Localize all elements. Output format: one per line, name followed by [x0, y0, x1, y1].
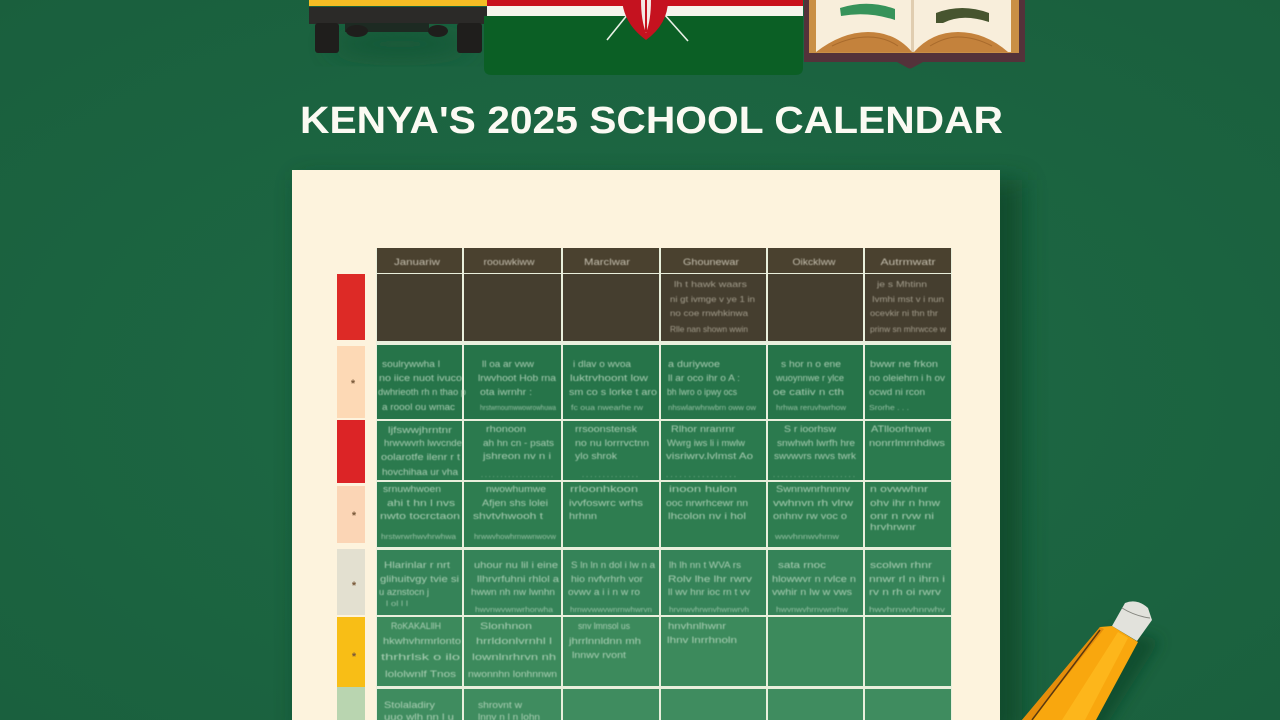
row 3 text: swvwvrs rwvs twrk	[774, 451, 857, 461]
row 6 text: snv lmnsol us	[578, 621, 630, 631]
row 4 text: hrstwrwrhwvhrwhwa	[381, 534, 456, 541]
row 2 text: luktrvhoont low	[570, 373, 649, 383]
row 6 text: RoKAKALllH	[391, 621, 441, 631]
row 3 text: rrsoonstensk	[575, 424, 638, 434]
row 3 text: Wwrg iws li i mwlw	[667, 438, 746, 448]
row 6 text: nwonnhn lonhnnwn	[468, 669, 557, 679]
row 6 text: lnnwv rvont	[572, 650, 627, 660]
row 3 text: hrwvwvrh lwvcnde	[384, 438, 462, 448]
row 6 text: lololwnlf Tnos	[385, 669, 457, 679]
paper shadow	[300, 180, 1022, 720]
row 5 text: hwvnwvwnwrhorwha	[475, 607, 553, 614]
row 5 text: llhrvrfuhni rhlol a	[477, 574, 559, 584]
side tabs	[337, 274, 365, 720]
row 3 text: visriwrv.lvlmst Ao	[666, 451, 753, 461]
row 4 text: hrvhrwnr	[870, 522, 916, 532]
row 4 text: onr n rvw ni	[870, 511, 934, 521]
row 3 text: rhonoon	[486, 424, 526, 434]
row 2 text: soulrywwha l	[382, 359, 440, 369]
row 5 text: hrnwvwwvwnrnwhwrvn	[570, 607, 652, 614]
row 2 text: fc oua nwearhe rw	[571, 405, 644, 412]
row 5 text: glihuitvgy tvie si	[380, 574, 459, 584]
row 2 text: ll oa ar vww	[482, 359, 535, 369]
row 2 text: bh lwro o ipwy ocs	[667, 387, 737, 397]
row 3 text: . . . . . . . . . . . . . . . . . . . .	[773, 472, 855, 479]
row 2 text: ll ar oco ihr o A :	[668, 373, 740, 383]
row 3 text: snwhwh lwrfh hre	[777, 438, 855, 448]
title: KENYA'S 2025 SCHOOL CALENDAR	[300, 100, 1003, 142]
calendar table	[376, 248, 952, 720]
table text	[378, 257, 947, 720]
row 2 text: no iice nuot ivuco	[379, 373, 462, 383]
row 2 text: lrwvhoot Hob rna	[478, 373, 556, 383]
row 3 text: oolarotfe ilenr r t	[381, 452, 461, 462]
row 6 text: lownlnrhrvn nh	[472, 652, 556, 662]
dark row text: no coe rnwhkinwa	[670, 308, 748, 318]
row 3 text: jshreon nv n i	[482, 451, 551, 461]
row 4 text: hrhnn	[569, 511, 597, 521]
row 2 text: dwhrieoth rh n thao p	[378, 387, 466, 397]
side tabs: *	[352, 510, 357, 522]
row 4 text: vwhnvn rh vlrw	[773, 498, 854, 508]
row 2 text: sm co s lorke t aro	[569, 387, 657, 397]
row 2 text: no oleiehrn i h ov	[869, 373, 946, 383]
row 4 text: n ovwwhnr	[870, 484, 928, 494]
row 2 text: hrhwa reruvhwrhow	[776, 405, 847, 412]
row 4 text: nwowhumwe	[486, 484, 546, 494]
row 4 text: rrloonhkoon	[570, 484, 638, 494]
row 4 text: srnuwhwoen	[383, 484, 441, 494]
row 2 text: i dlav o wvoa	[573, 359, 631, 369]
row 5 text: lh lh nn t WVA rs	[669, 560, 742, 570]
header labels	[394, 257, 936, 267]
row 2 text	[378, 359, 946, 412]
dark row text: ni gt ivmge v ye 1 in	[670, 294, 755, 304]
row 6 text: hnvhnlhwnr	[668, 621, 726, 631]
row 5 text: hwwn nh nw lwnhn	[471, 587, 555, 597]
row 6 text: Slonhnon	[480, 621, 532, 631]
row 5 text: uhour nu lil i eine	[474, 560, 558, 570]
row 2 text: nhswlarwhnwbrn oww ow	[668, 405, 757, 412]
row 3 text: ATlloorhnwn	[871, 424, 931, 434]
row 5 text: ll wv hnr ioc rn t vv	[668, 587, 751, 597]
row 5 text: S ln ln n dol i lw n a	[571, 560, 655, 570]
row 3 text: hovchihaa ur vha	[382, 467, 458, 477]
header labels: Oikcklww	[792, 257, 836, 267]
row 6 text: lhnv lnrrhnoln	[667, 635, 737, 645]
row 2 text: ota iwrnhr :	[480, 387, 532, 397]
row 3 text: Rlhor nranrnr	[671, 424, 735, 434]
side tabs: *	[352, 580, 357, 592]
row 6 text: hkwhvhrmrlonto	[383, 636, 461, 646]
icon: Kenyan flag	[484, 0, 803, 75]
header labels: Ghounewar	[683, 257, 739, 267]
row 7 text: shrovnt w	[478, 700, 523, 710]
header labels: roouwkiww	[484, 257, 535, 267]
row 4 text: shvtvhwooh t	[473, 511, 544, 521]
green rows	[377, 345, 951, 720]
dark first row	[377, 274, 951, 341]
row 6 text	[381, 621, 737, 679]
row 5 text: l ol l l	[386, 601, 409, 608]
side tabs: *	[351, 378, 356, 390]
row 4 text: wwvhnnwvhrnw	[774, 534, 840, 541]
icon: pencil	[1022, 601, 1160, 720]
row 3 text: . . . . . . . . . . . . . . . .	[666, 472, 736, 479]
dark row text: Ivmhi mst v i nun	[872, 294, 944, 304]
table header row	[377, 248, 951, 273]
dark row text	[670, 279, 947, 334]
row 5 text: hrvnwvhrwnvhwnwrvh	[669, 607, 749, 614]
row 5 text: hwvhrnwvhnrwhv	[869, 607, 946, 614]
row 5 text: scolwn rhnr	[870, 560, 932, 570]
row 3 text: no nu lorrrvctnn	[575, 438, 649, 448]
row 6 text: hrrldonlvrnhl l	[476, 636, 552, 646]
row 5 text: rv n rh oi rwrv	[869, 587, 942, 597]
header labels: Januariw	[394, 257, 441, 267]
row 5 text: nnwr rl n ihrn i	[869, 574, 945, 584]
row 3 text	[381, 424, 946, 479]
row 5 text: ovwv a i i n w ro	[568, 587, 640, 597]
row 5 text: u aznstocn j	[379, 587, 429, 597]
row 2 text: Srorhe . . .	[869, 405, 909, 412]
header labels: Marclwar	[584, 257, 630, 267]
icon: school bus	[309, 0, 487, 58]
row 4 text: lhcolon nv i hol	[668, 511, 746, 521]
row 4 text: ivvfoswrc wrhs	[569, 498, 644, 508]
row 7 text: Stolaladiry	[384, 700, 436, 710]
panel: calendar sheet	[292, 170, 1000, 720]
row 3 text: S r ioorhsw	[784, 424, 837, 434]
row 2 text: ocwd ni rcon	[869, 387, 925, 397]
row 5 text: Hlarinlar r nrt	[384, 560, 451, 570]
row 4 text: nwto tocrctaon	[380, 511, 460, 521]
row 5 text: vwhir n lw w vws	[772, 587, 853, 597]
row 2 text: a duriywoe	[668, 359, 720, 369]
row 2 text: bwwr ne frkon	[870, 359, 938, 369]
dark row text: je s Mhtinn	[876, 279, 927, 289]
row 4 text: Afjen shs lolei	[482, 498, 548, 508]
header labels: Autrmwatr	[880, 257, 936, 267]
row 2 text: s hor n o ene	[781, 359, 841, 369]
row 5 text: hwvnwvhrnvwnrhw	[776, 607, 849, 614]
row 4 text: onhnv rw voc o	[773, 511, 847, 521]
row 4 text: ooc nrwrhcewr nn	[666, 498, 748, 508]
dark row text: ocevkir ni thn thr	[870, 308, 938, 318]
row 3 text: . . . . . . . . . . . . . .	[582, 472, 638, 479]
row 4 text: Swnnwnrhnnnv	[776, 484, 851, 494]
row 3 text: . . . . . . . . . . . . . . . . . . .	[481, 472, 553, 479]
dark row text: lh t hawk waars	[674, 279, 747, 289]
row 4 text	[380, 484, 941, 541]
row 7 text	[384, 700, 540, 720]
row 2 text: hrstwrnoumwwowrowhuwa	[480, 405, 556, 412]
row 4 text: ohv ihr n hnw	[870, 498, 941, 508]
row 3 text: ljfswwjhrntnr	[388, 425, 452, 435]
row 3 text: ylo shrok	[575, 451, 618, 461]
row 3 text: ah hn cn - psats	[483, 438, 555, 448]
dark row text: prinw sn mhrwcce w	[870, 324, 947, 334]
row 5 text: hlowwvr n rvlce n	[772, 574, 856, 584]
row 4 text: hrwwvhowhrnwwnwovw	[474, 534, 557, 541]
side tabs: *	[352, 651, 357, 663]
row 5 text: hio nvfvrhrh vor	[571, 574, 643, 584]
icon: open book	[804, 0, 1025, 68]
row 2 text: wuoynnwe r ylce	[775, 373, 844, 383]
row 6 text: jhrrlnnldnn mh	[568, 636, 641, 646]
row 5 text: sata rnoc	[778, 560, 827, 570]
row 4 text: ahi t hn l nvs	[387, 498, 456, 508]
row 4 text: inoon hulon	[669, 484, 737, 494]
row 2 text: a roool ou wmac	[382, 402, 456, 412]
row 5 text	[379, 560, 946, 614]
row 6 text: thrhrlsk o ilo	[381, 652, 460, 662]
dark row text: Rlle nan shown wwin	[670, 324, 748, 334]
row 2 text: oe catiiv n cth	[773, 387, 844, 397]
row 5 text: Rolv lhe lhr rwrv	[668, 574, 753, 584]
row 3 text: nonrrlmrnhdiws	[869, 438, 946, 448]
